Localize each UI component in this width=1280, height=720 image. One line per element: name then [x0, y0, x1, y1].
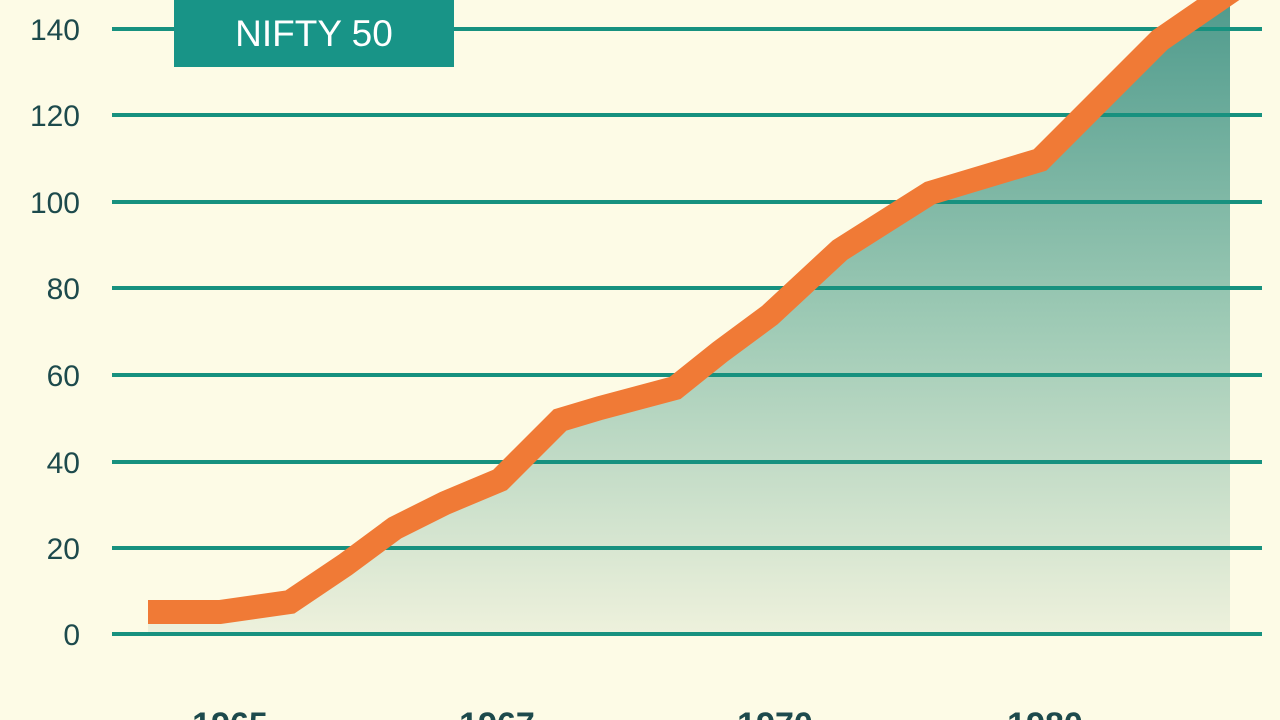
title: NIFTY 50 — [235, 13, 393, 54]
y axis labels: 60 — [47, 360, 80, 393]
y axis labels: 20 — [47, 533, 80, 566]
title — [174, 0, 454, 67]
y axis labels: 120 — [30, 100, 80, 133]
y axis labels: 140 — [30, 14, 80, 47]
area fill under line — [148, 0, 1230, 634]
x axis labels — [192, 706, 1083, 720]
y axis labels: 100 — [30, 187, 80, 220]
data line — [148, 0, 1240, 612]
y axis labels — [30, 14, 80, 652]
y axis labels: 40 — [47, 447, 80, 480]
y axis labels: 80 — [47, 273, 80, 306]
y axis labels: 0 — [63, 619, 80, 652]
